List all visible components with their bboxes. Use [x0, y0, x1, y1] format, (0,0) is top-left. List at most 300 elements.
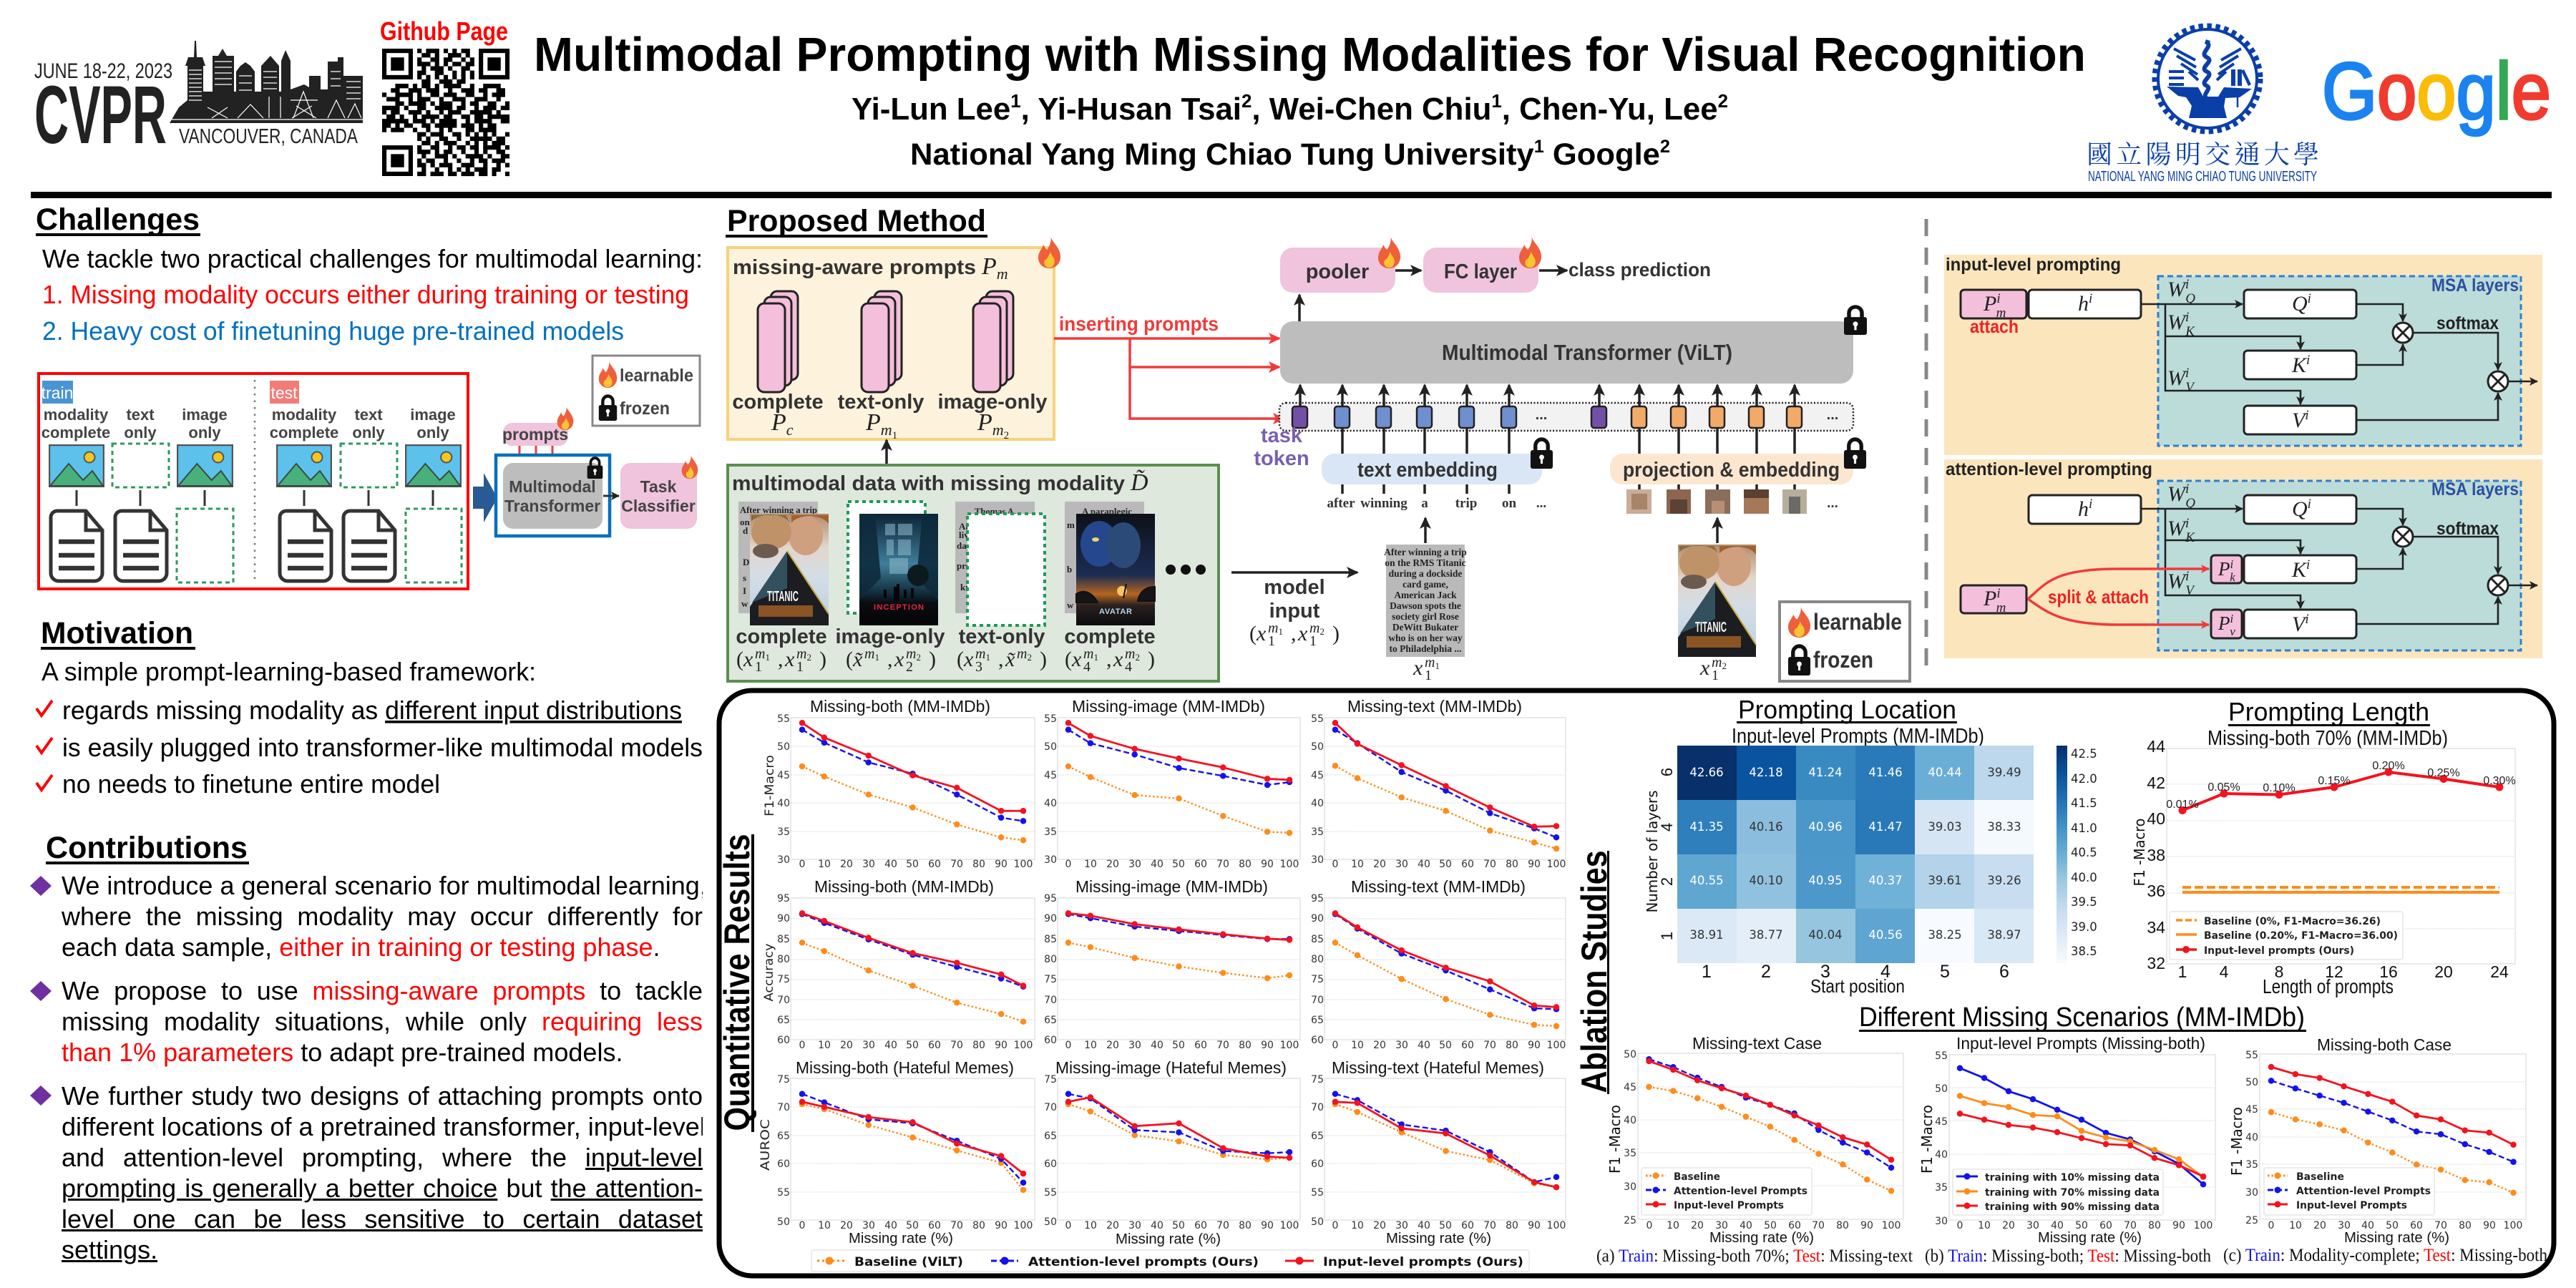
sample formula 4	[1065, 646, 1155, 675]
label: class prediction: class prediction	[1568, 259, 1711, 280]
line chart: Missing-both MM-IMDb Accuracy: 20	[840, 1040, 853, 1051]
line chart: Input-level Prompts Missing-both: 20	[2002, 1220, 2015, 1231]
line chart: Missing-both Hateful Memes AUROC: 80	[972, 1220, 985, 1231]
line chart: Missing-image MM-IMDb F1-Macro: 40	[1044, 798, 1057, 809]
arrow: data to prompts	[885, 440, 888, 465]
heatmap: input-level prompts: 4	[1658, 823, 1676, 831]
diagram: train and test missing modality grid	[39, 374, 468, 589]
line chart: Missing-image MM-IMDb Accuracy: 10	[1084, 1040, 1097, 1051]
sample formula 1: 1	[796, 659, 804, 675]
line chart: Missing-image MM-IMDb F1-Macro: 90	[1261, 859, 1274, 870]
heatmap: input-level prompts: 40.04	[1808, 928, 1843, 942]
line chart: Missing-text MM-IMDb F1-Macro: 100	[1547, 859, 1566, 870]
legend: training with 10% missing data	[1985, 1172, 2160, 1184]
sample formula 3: x̃	[1005, 648, 1015, 671]
sample: complete Titanic: I	[743, 585, 746, 596]
h box	[2029, 495, 2141, 524]
legend: training with 70% missing data	[1985, 1187, 2160, 1199]
label: text modality	[1413, 655, 1440, 683]
text input document: DeWitt Bukater	[1392, 622, 1458, 633]
heading: Challenges: Challenges	[36, 203, 200, 237]
legend	[2170, 912, 2403, 960]
line chart: Missing-both Case: 60	[2410, 1220, 2423, 1231]
icon: flame	[557, 406, 573, 430]
arrow and label: model input: model	[1264, 576, 1325, 599]
column labels: modality	[44, 406, 109, 424]
line chart: Missing-both Case: 25	[2245, 1215, 2258, 1226]
text input document: to Philadelphia ...	[1390, 643, 1461, 654]
text input document: during a dockside	[1389, 568, 1462, 579]
line chart: Input-level Prompts Missing-both: Input-level Prompts (Missing-both)	[1956, 1034, 2205, 1053]
checks	[36, 701, 52, 790]
line chart: Missing-both Case: 20	[2313, 1220, 2326, 1231]
line chart: Missing-text MM-IMDb F1-Macro	[1311, 697, 1566, 870]
colorbar: 38.5	[2071, 945, 2097, 958]
line chart: Missing-text Case: F1 -Macro	[1606, 1105, 1624, 1174]
y axis label: AUROC: AUROC	[758, 1119, 773, 1171]
label: text modality: m	[1425, 655, 1435, 670]
line chart: Missing-text Hateful Memes AUROC: 70	[1311, 1102, 1324, 1113]
line chart: Missing-image MM-IMDb Accuracy: 70	[1216, 1040, 1229, 1051]
task classifier box: Classifier	[621, 497, 696, 515]
K box: i	[2306, 353, 2310, 368]
line chart: Missing-text Case: 30	[1624, 1181, 1636, 1193]
line chart: Missing-both MM-IMDb F1-Macro: 80	[972, 859, 985, 870]
line chart: Missing-text Case: 90	[1860, 1220, 1873, 1231]
K box	[2244, 351, 2356, 379]
sample formula 2: ,	[887, 648, 893, 671]
image patches: ...	[1827, 496, 1838, 511]
heatmap: input-level prompts: 40.16	[1749, 820, 1783, 834]
line chart: Missing-text MM-IMDb Accuracy: 60	[1311, 1035, 1324, 1046]
chart legend: quantitative results: Baseline (ViLT)	[854, 1255, 963, 1269]
line chart: Missing-text Case: 10	[1667, 1220, 1679, 1231]
line chart: Missing-image Hateful Memes AUROC: 80	[1239, 1220, 1252, 1231]
title: Multimodal Prompting with Missing Modalities for Visual Recognition	[534, 28, 2086, 82]
prompt box: i	[1996, 586, 2001, 601]
line chart: Missing-image MM-IMDb Accuracy: 0	[1065, 1040, 1071, 1051]
line chart: Missing-text MM-IMDb F1-Macro: 40	[1311, 798, 1324, 809]
line chart: prompting length: 0.20%	[2372, 760, 2405, 772]
line chart: Missing-both Case: 70	[2434, 1220, 2447, 1231]
line chart: Missing-text Hateful Memes AUROC: 20	[1373, 1220, 1386, 1231]
prompt box: m	[1996, 306, 2006, 321]
line chart: Missing-text Hateful Memes AUROC: 30	[1395, 1220, 1408, 1231]
text input document: American Jack	[1394, 590, 1457, 600]
K box with prompt: k	[2230, 570, 2235, 584]
line chart: prompting length: F1 -Macro	[2131, 819, 2148, 886]
line chart: Missing-image MM-IMDb F1-Macro: 20	[1106, 859, 1119, 870]
sample: complete Titanic: TITANIC	[767, 589, 799, 605]
line chart: Missing-both Case: 50	[2386, 1220, 2399, 1231]
line chart: Missing-text MM-IMDb F1-Macro: 30	[1311, 854, 1324, 866]
sample: complete Titanic: D	[743, 557, 749, 567]
panel: missing-aware prompts	[728, 237, 1060, 441]
line chart: Missing-text MM-IMDb Accuracy: 90	[1311, 913, 1324, 924]
sample formula 2: 2	[916, 652, 921, 663]
heading: Proposed Method: Proposed Method	[727, 204, 986, 238]
line chart: Missing-image Hateful Memes AUROC: 70	[1044, 1102, 1057, 1113]
sample: complete Titanic	[738, 502, 829, 625]
sample formula 4: ,	[1106, 648, 1112, 671]
line chart: Missing-both MM-IMDb F1-Macro: 70	[950, 859, 963, 870]
line chart: Missing-both MM-IMDb F1-Macro: 60	[928, 859, 941, 870]
results frame	[719, 691, 2554, 1276]
line chart: Missing-both Case: 80	[2459, 1220, 2472, 1231]
heatmap: input-level prompts: 41.35	[1689, 820, 1724, 834]
icon: flame	[1038, 237, 1060, 268]
line chart: prompting length: 32	[2147, 954, 2165, 972]
line chart: Missing-image MM-IMDb Accuracy: 80	[1044, 954, 1057, 965]
K box with prompt: K	[2292, 558, 2306, 582]
line chart: Missing-both MM-IMDb Accuracy: 60	[928, 1040, 941, 1051]
line chart: Missing-text Case	[1606, 1034, 1903, 1246]
MSA layers box	[2158, 479, 2521, 650]
line chart: Missing-text MM-IMDb Accuracy: 95	[1311, 893, 1324, 904]
sample: text-only: Thomas A.	[975, 506, 1016, 517]
line chart: Input-level Prompts Missing-both: F1 -Macro	[1918, 1105, 1936, 1174]
W labels: W	[2167, 278, 2185, 301]
line chart: Missing-text Hateful Memes AUROC	[1311, 1058, 1566, 1231]
arrow and label: model input	[1231, 572, 1357, 649]
word tokens: winning	[1360, 496, 1407, 511]
line chart: Missing-both Hateful Memes AUROC: 100	[1014, 1220, 1033, 1231]
line chart: Missing-image Hateful Memes AUROC: Missing-image (Hateful Memes)	[1055, 1058, 1287, 1077]
colorbar: 42.0	[2071, 772, 2097, 786]
task classifier box: Task	[640, 477, 677, 496]
label: image modality: 1	[1712, 668, 1719, 683]
h box: i	[2089, 497, 2092, 512]
line chart: Input-level Prompts Missing-both: 0	[1957, 1220, 1963, 1231]
line chart: Missing-image Hateful Memes AUROC: 20	[1106, 1220, 1119, 1231]
text input document: who is on her way	[1388, 633, 1463, 643]
arrow and label: model input: 1	[1309, 633, 1317, 649]
line chart: Input-level Prompts Missing-both: 30	[1935, 1216, 1948, 1227]
h box: i	[2089, 291, 2092, 306]
word tokens: ...	[1536, 496, 1546, 511]
line chart: Missing-text MM-IMDb F1-Macro: 30	[1395, 859, 1408, 870]
prompt stack: image-only	[937, 291, 1048, 441]
sample formula 3: 3	[975, 659, 982, 675]
authors: 2	[1718, 90, 1728, 112]
heatmap: input-level prompts: 40.96	[1808, 820, 1843, 834]
V box with prompt: V	[2292, 613, 2305, 636]
sample labels: text-only	[959, 625, 1045, 648]
heatmap: input-level prompts	[1644, 746, 2097, 997]
line chart: Missing-text MM-IMDb F1-Macro: 10	[1351, 859, 1364, 870]
legend: learnable frozen	[1780, 602, 1910, 681]
word tokens: a	[1421, 496, 1428, 511]
line chart: Missing-both MM-IMDb Accuracy: 60	[777, 1035, 790, 1046]
heading: Prompting Length: Prompting Length	[2228, 697, 2429, 726]
image patches	[1626, 484, 1838, 514]
K box with prompt	[2211, 555, 2356, 584]
line chart: Missing-text MM-IMDb Accuracy: Missing-text (MM-IMDb)	[1351, 877, 1526, 896]
sample formula 3: )	[1040, 648, 1047, 671]
label: softmax: softmax	[2436, 313, 2499, 333]
line chart: Missing-image Hateful Memes AUROC: 0	[1065, 1220, 1071, 1231]
W labels: i	[2185, 310, 2189, 325]
line chart: Missing-image MM-IMDb F1-Macro: 50	[1044, 741, 1057, 753]
label: task token: token	[1254, 447, 1309, 470]
heading: Prompting Location: Prompting Location	[1738, 695, 1956, 724]
prompts panel heading: P	[982, 253, 997, 280]
Q box: Q	[2292, 497, 2308, 521]
heatmap: input-level prompts: Number of layers	[1644, 790, 1661, 913]
line chart: Missing-text MM-IMDb F1-Macro: 45	[1311, 770, 1324, 781]
caption (c): (c) Train: Modality-complete; Test: Missing-both	[2223, 1246, 2547, 1265]
line chart: Missing-image MM-IMDb Accuracy: 65	[1044, 1015, 1057, 1026]
heatmap: input-level prompts: 38.77	[1749, 928, 1783, 942]
Q box	[2244, 290, 2356, 318]
word tokens	[1327, 484, 1546, 511]
sample labels: complete	[736, 625, 827, 648]
sample formula 4: 2	[1135, 652, 1140, 663]
line chart: Missing-text Case: 45	[1624, 1082, 1636, 1093]
line chart: prompting length: 24	[2490, 962, 2509, 981]
affiliations: 2	[1660, 137, 1670, 157]
prompt stack: complete: c	[786, 421, 794, 439]
K box with prompt: i	[2306, 557, 2310, 572]
line chart: Missing-text Case: 60	[1788, 1220, 1801, 1231]
line chart: Missing-image MM-IMDb Accuracy: 20	[1106, 1040, 1119, 1051]
sample formula 4: 1	[1093, 652, 1098, 663]
authors: 1	[1010, 90, 1021, 112]
prompt stack: text-only: text-only	[838, 391, 924, 414]
line chart: Missing-text Hateful Memes AUROC: 80	[1506, 1220, 1518, 1231]
heatmap: input-level prompts: 38.25	[1928, 928, 1962, 942]
line chart: Missing-image Hateful Memes AUROC: 50	[1172, 1220, 1185, 1231]
line chart: Missing-both MM-IMDb Accuracy: 30	[862, 1040, 875, 1051]
label: text modality: 1	[1425, 668, 1432, 683]
sample formula 1: 1	[755, 659, 762, 675]
colorbar: 40.0	[2071, 871, 2097, 884]
legend: learnable frozen: frozen	[1813, 647, 1873, 673]
heading: attention-level prompting	[1946, 459, 2152, 479]
token sequence: ...	[1536, 407, 1547, 423]
line chart: Missing-image MM-IMDb Accuracy: 30	[1128, 1040, 1141, 1051]
line chart: Missing-text Case: 70	[1812, 1220, 1825, 1231]
line chart: Missing-both Case: 40	[2361, 1220, 2374, 1231]
W labels	[2167, 277, 2195, 395]
line chart: Missing-text MM-IMDb Accuracy: 65	[1311, 1015, 1324, 1026]
line chart: Missing-both MM-IMDb Accuracy: 100	[1014, 1040, 1033, 1051]
icon: lock	[1844, 307, 1867, 335]
line chart: Missing-text MM-IMDb F1-Macro: 70	[1483, 859, 1496, 870]
line chart: Missing-both MM-IMDb F1-Macro: 20	[840, 859, 853, 870]
line chart: Missing-both Case: F1 -Macro	[2228, 1107, 2245, 1176]
arrow and label: model input: input	[1269, 600, 1320, 623]
line chart: Missing-text MM-IMDb Accuracy: 40	[1418, 1040, 1430, 1051]
sample formula 2	[846, 646, 936, 675]
projection and embedding pill: projection & embedding	[1623, 459, 1840, 482]
heading: input-level prompting	[1946, 255, 2121, 275]
line chart: Input-level Prompts Missing-both: 50	[2075, 1220, 2088, 1231]
line chart: Missing-image Hateful Memes AUROC: 10	[1084, 1220, 1097, 1231]
contribution 2	[62, 975, 703, 1068]
heatmap: input-level prompts: 3	[1820, 962, 1830, 982]
line chart: Missing-text Case: 35	[1624, 1148, 1636, 1159]
sample formula 2: )	[929, 648, 936, 671]
line chart: Missing-both Case: Missing rate (%)	[2344, 1230, 2449, 1246]
line chart: Missing-text Case: Missing-text Case	[1692, 1034, 1822, 1053]
authors: 1	[1491, 90, 1502, 112]
line chart: Missing-text Case: 100	[1882, 1220, 1901, 1231]
sample formula 2: 2	[906, 659, 913, 675]
line chart: Missing-text Hateful Memes AUROC: 55	[1311, 1187, 1324, 1199]
diagram: transformer with prompts	[496, 406, 698, 536]
icon: lock	[1531, 439, 1553, 469]
x axis label column 3: Missing rate (%)	[1386, 1231, 1491, 1246]
sample: image-only Inception: INCEPTION	[874, 603, 924, 612]
caption (b): (b) Train: Missing-both; Test: Missing-both	[1925, 1246, 2211, 1266]
colorbar: 42.5	[2071, 747, 2097, 761]
sample formula 1: 2	[806, 652, 811, 663]
diamonds	[30, 876, 52, 1106]
line chart: Missing-both MM-IMDb Accuracy: 10	[818, 1040, 831, 1051]
arrow and label: model input: 2	[1319, 626, 1324, 637]
legend: Input-level Prompts	[2296, 1200, 2407, 1211]
motivation bullet 1: regards missing modality as different input distributions	[62, 696, 682, 725]
line chart: Missing-text MM-IMDb F1-Macro: 50	[1439, 859, 1452, 870]
W labels	[2167, 482, 2195, 598]
sample formula 4: x	[1113, 648, 1123, 671]
line chart: Missing-both Case: 10	[2289, 1220, 2302, 1231]
line chart: Missing-both MM-IMDb F1-Macro: 50	[777, 741, 790, 753]
sample formula 4: 4	[1125, 659, 1132, 675]
arrow and label: model input: (	[1249, 622, 1257, 645]
prompts pill: prompts	[502, 425, 568, 444]
Q box: i	[2308, 291, 2311, 306]
Github Page link label: Github Page	[380, 16, 508, 46]
line chart: Missing-image MM-IMDb Accuracy	[1044, 877, 1300, 1051]
line chart: prompting length: 36	[2147, 882, 2165, 900]
MSA layers box: MSA layers	[2431, 479, 2519, 499]
sample: text-only: liv	[959, 530, 969, 540]
line chart: Missing-both Hateful Memes AUROC: Missing-both (Hateful Memes)	[796, 1058, 1014, 1077]
line chart: Missing-both Hateful Memes AUROC	[777, 1058, 1035, 1231]
line chart: Missing-both Case: 40	[2245, 1132, 2258, 1143]
line chart: Missing-both Hateful Memes AUROC: 40	[884, 1220, 897, 1231]
line chart: Missing-text MM-IMDb F1-Macro: 0	[1332, 859, 1338, 870]
challenge intro text: We tackle two practical challenges for multimodal learning:	[42, 244, 703, 273]
line chart: Missing-image MM-IMDb Accuracy: 100	[1280, 1040, 1299, 1051]
heatmap: input-level prompts: 39.26	[1987, 874, 2021, 887]
image input poster	[1678, 545, 1756, 657]
Q box	[2244, 495, 2356, 524]
sample formula 3: (	[957, 648, 964, 671]
prompt stack: image-only: m	[992, 421, 1004, 439]
line chart: Missing-image Hateful Memes AUROC: 100	[1280, 1220, 1299, 1231]
ellipsis dots	[1171, 565, 1201, 575]
line chart: Missing-image MM-IMDb F1-Macro: 100	[1280, 859, 1299, 870]
line chart: Missing-text Hateful Memes AUROC: 100	[1547, 1220, 1566, 1231]
sample: text-only: kn	[960, 582, 971, 592]
line chart: Missing-image MM-IMDb F1-Macro: 30	[1044, 854, 1057, 866]
line chart: Input-level Prompts Missing-both	[1918, 1034, 2215, 1246]
line chart: Missing-text Case: 40	[1740, 1220, 1752, 1231]
line chart: Missing-text Hateful Memes AUROC: 0	[1332, 1220, 1338, 1231]
line chart: Missing-both Case: 55	[2245, 1050, 2258, 1061]
chart legend: quantitative results: Input-level prompts (Ours)	[1323, 1255, 1523, 1269]
contribution 3: settings.	[62, 1235, 157, 1264]
line chart: Input-level Prompts Missing-both: 70	[2124, 1220, 2137, 1231]
sample formula 2: x	[894, 648, 904, 671]
FC layer box: FC layer	[1444, 260, 1517, 283]
line chart: Missing-text MM-IMDb Accuracy: 85	[1311, 934, 1324, 945]
line chart: Missing-text Case: 20	[1691, 1220, 1704, 1231]
W labels: V	[2185, 583, 2195, 598]
line chart: Missing-text MM-IMDb Accuracy: 100	[1547, 1040, 1566, 1051]
icon: lock	[1844, 439, 1866, 469]
K box: K	[2292, 353, 2306, 377]
line chart: Missing-both MM-IMDb Accuracy: 40	[884, 1040, 897, 1051]
heading: Contributions: Contributions	[46, 831, 248, 865]
K box with prompt: P	[2218, 558, 2230, 580]
line chart: Missing-text MM-IMDb Accuracy: 50	[1439, 1040, 1452, 1051]
icon: flame	[1378, 237, 1400, 268]
line chart: Missing-text MM-IMDb Accuracy: 30	[1395, 1040, 1408, 1051]
sample formula 4: x	[1071, 648, 1082, 671]
W labels: W	[2167, 366, 2185, 390]
panel: multimodal data	[728, 465, 1219, 681]
heatmap: input-level prompts: 42.18	[1749, 766, 1783, 779]
authors: Yi-Lun Lee	[852, 92, 1011, 127]
arrow and label: model input: x	[1297, 622, 1308, 645]
W labels: i	[2185, 277, 2189, 292]
line chart: Missing-text MM-IMDb Accuracy: 80	[1311, 954, 1324, 965]
line chart: Missing-both MM-IMDb F1-Macro	[777, 697, 1035, 870]
line chart: prompting length: 0.15%	[2318, 775, 2351, 787]
line chart: Input-level Prompts Missing-both: 40	[2051, 1220, 2064, 1231]
column labels: image	[410, 406, 456, 424]
line chart: Missing-both Case: 45	[2245, 1104, 2258, 1116]
V box with prompt	[2211, 610, 2356, 638]
V box: V	[2292, 409, 2305, 432]
CVPR 2023 logo: VANCOUVER, CANADA	[179, 125, 358, 148]
sample formula 1: ,	[778, 648, 783, 671]
line chart: Missing-both MM-IMDb F1-Macro: 90	[995, 859, 1008, 870]
arrow: text to embedding	[1424, 518, 1427, 543]
line chart: Missing-image MM-IMDb Accuracy: 60	[1044, 1035, 1057, 1046]
heatmap: input-level prompts: 40.10	[1749, 874, 1783, 887]
sample formula 4: m	[1125, 646, 1135, 662]
line chart: Missing-both MM-IMDb Accuracy: 0	[799, 1040, 805, 1051]
line chart: Missing-both MM-IMDb Accuracy: 90	[995, 1040, 1008, 1051]
line chart: Missing-image MM-IMDb F1-Macro: 35	[1044, 826, 1057, 838]
modality icons	[49, 444, 462, 582]
column labels: complete	[270, 424, 338, 441]
colorbar: 41.5	[2071, 796, 2097, 810]
projection and embedding pill	[1610, 454, 1853, 484]
line chart: Input-level Prompts Missing-both: 35	[1935, 1182, 1948, 1194]
line chart: Missing-image MM-IMDb F1-Macro: 80	[1239, 859, 1252, 870]
contribution 2: than 1% parameters to adapt pre-trained models.	[62, 1038, 623, 1067]
multimodal transformer ViLT: Multimodal Transformer (ViLT)	[1442, 340, 1732, 365]
token sequence	[1279, 385, 1853, 454]
sample formula 3: m	[1017, 646, 1027, 662]
line chart: Missing-image Hateful Memes AUROC: 60	[1044, 1158, 1057, 1170]
line chart: Missing-image MM-IMDb F1-Macro: 40	[1151, 859, 1163, 870]
h box	[2029, 290, 2141, 318]
line chart: Missing-both Hateful Memes AUROC: 60	[928, 1220, 941, 1231]
colorbar: 40.5	[2071, 846, 2097, 859]
column labels: text	[126, 406, 155, 424]
line chart: Missing-image Hateful Memes AUROC	[1044, 1058, 1300, 1231]
heatmap: input-level prompts: 6	[1999, 962, 2009, 982]
heatmap: input-level prompts: 39.61	[1928, 874, 1962, 887]
h box: h	[2078, 497, 2089, 521]
